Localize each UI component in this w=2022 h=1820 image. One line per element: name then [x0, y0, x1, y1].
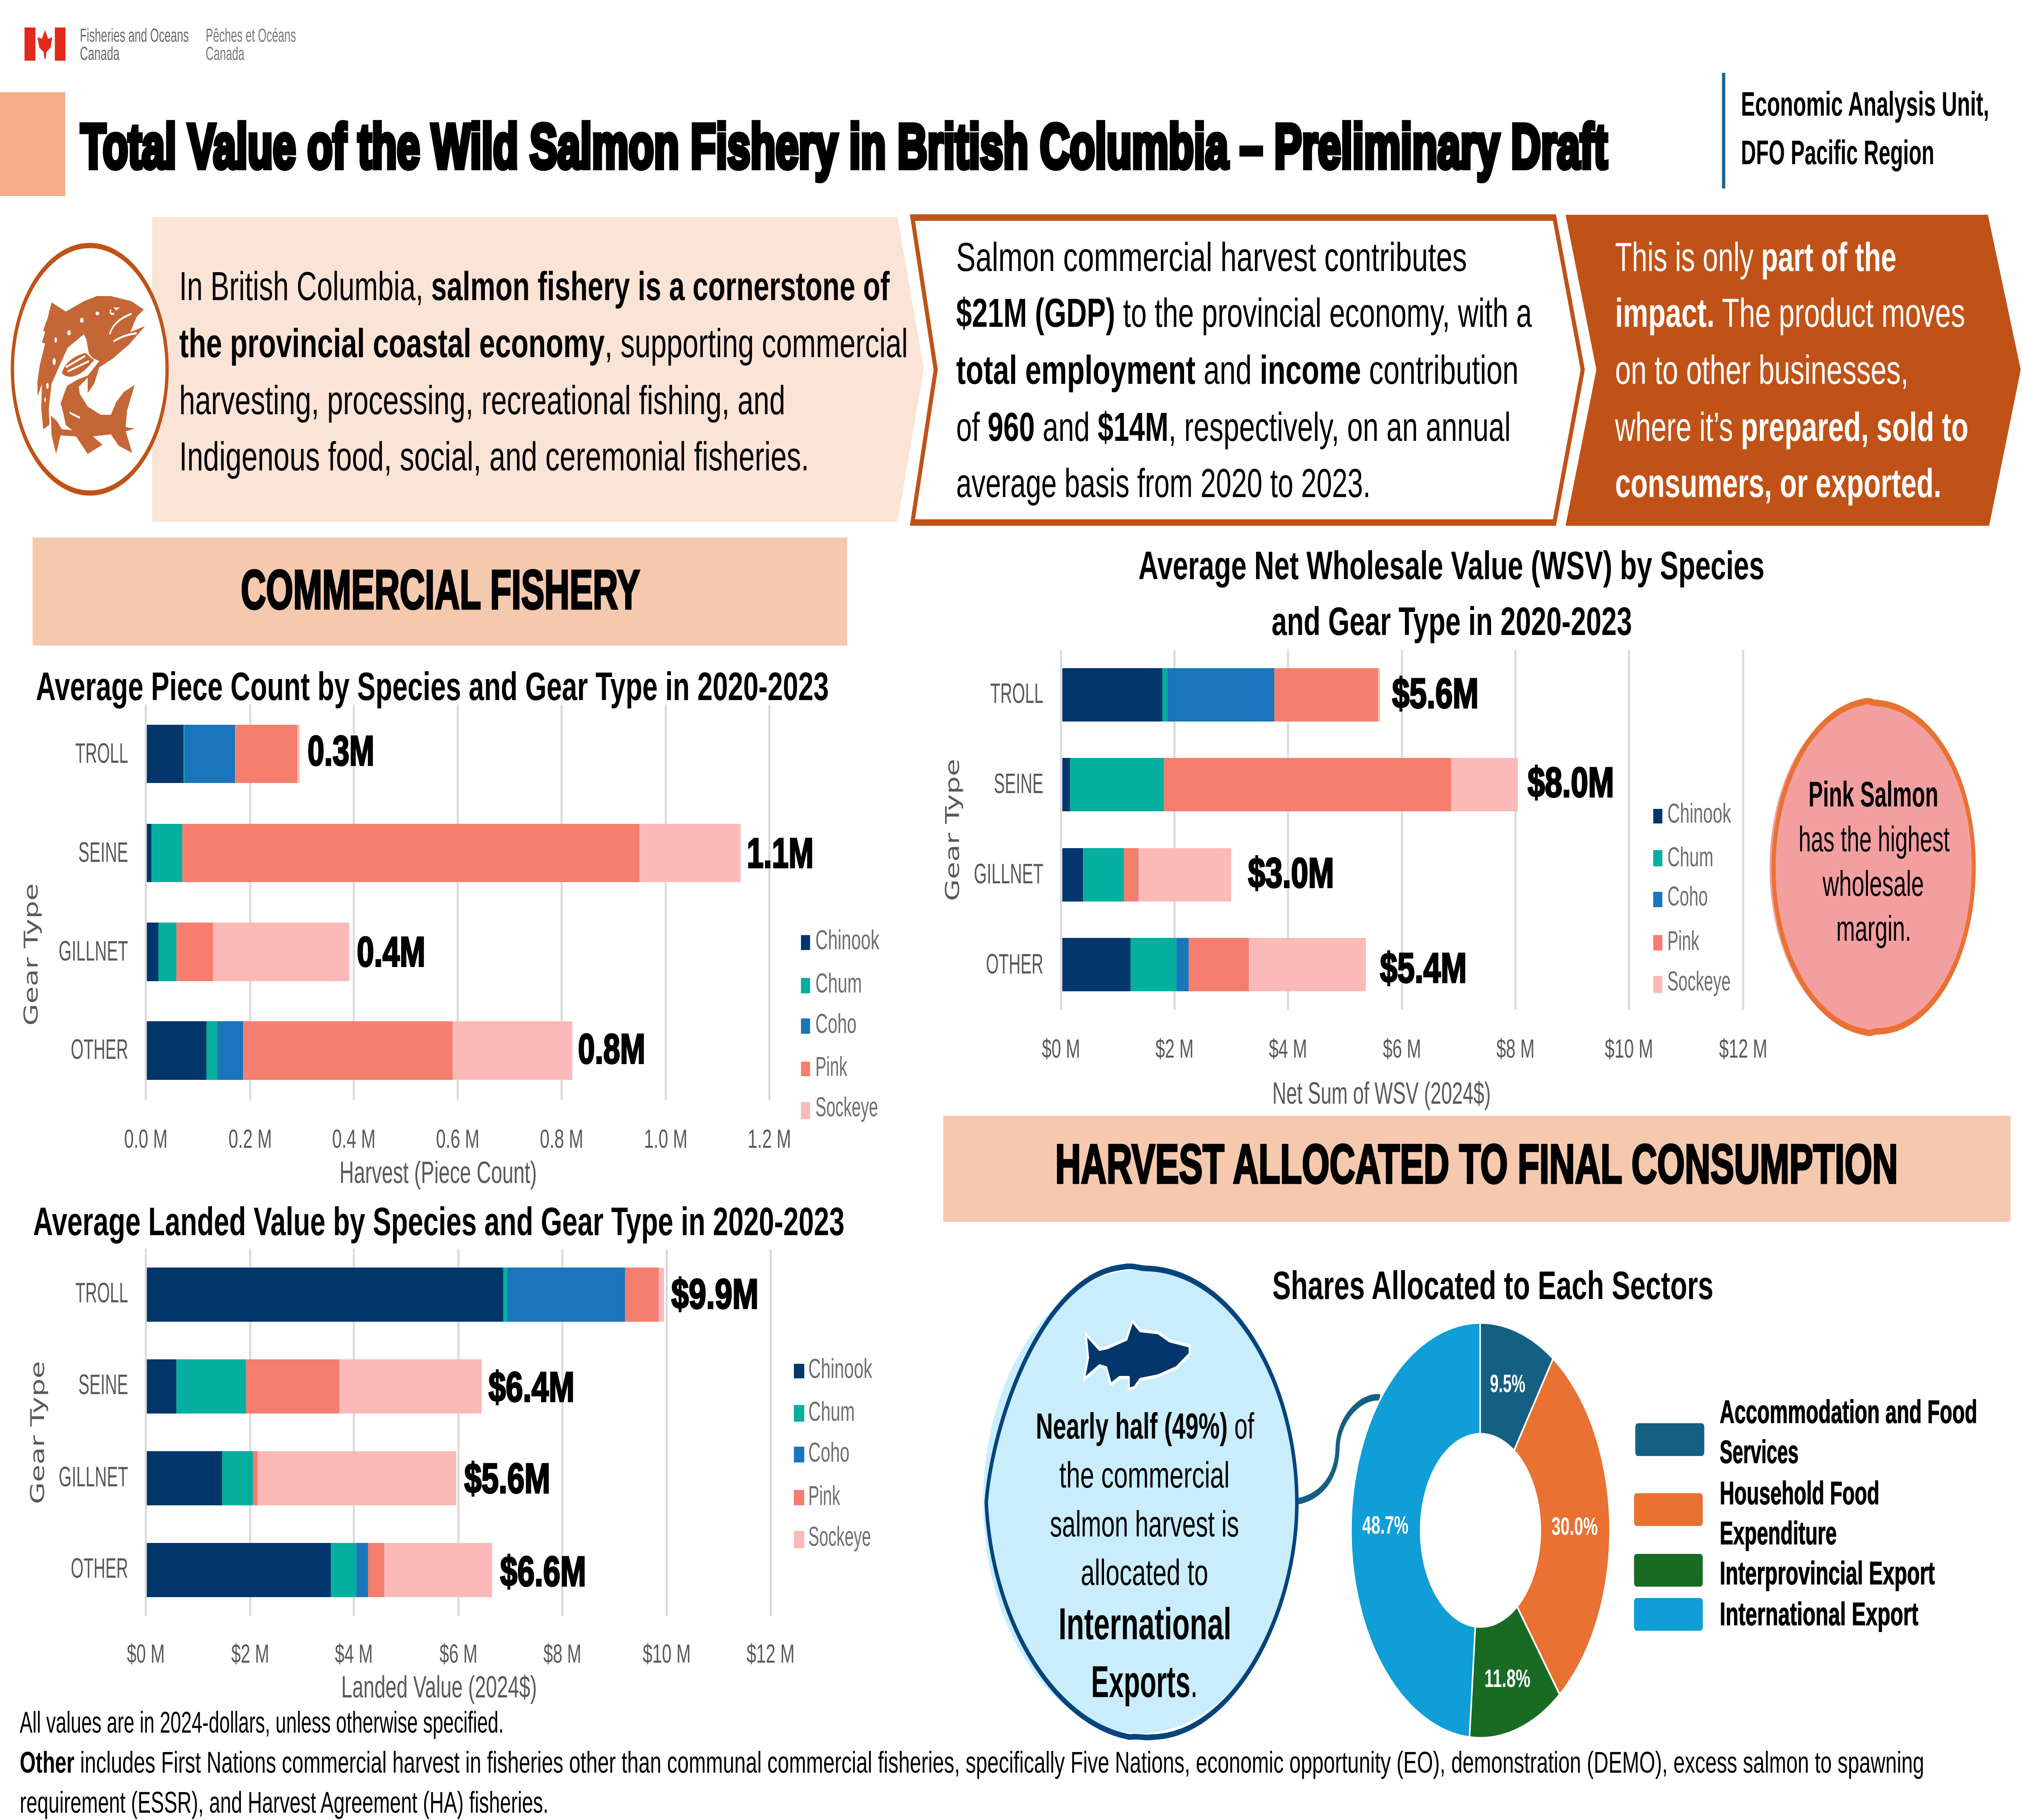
GDP text: $21M (GDP) to the provincial economy, with a	[956, 290, 1532, 336]
bar: troll	[1062, 668, 1380, 722]
chart title: wholesale value	[1138, 544, 1764, 644]
bar chart: landed value: $2 M	[231, 1639, 269, 1668]
bar chart: wholesale value: $6 M	[1383, 1034, 1421, 1063]
bar chart: piece count: TROLL	[75, 738, 128, 769]
unit attribution: DFO Pacific Region	[1741, 133, 1934, 171]
legend: species: Sockeye	[808, 1522, 871, 1552]
bar chart: piece count: 0.3M	[308, 727, 374, 775]
intro text: In British Columbia, salmon fishery is a cornerstone of	[179, 264, 890, 309]
bar chart: landed value: $10 M	[643, 1639, 691, 1668]
bar chart: piece count: 1.2 M	[748, 1124, 791, 1153]
legend: species: Coho	[1667, 881, 1708, 912]
unit attribution: Economic Analysis Unit,	[1741, 85, 1989, 123]
bar chart: piece count: 0.8M	[578, 1025, 645, 1073]
bar chart: wholesale value: $10 M	[1605, 1034, 1653, 1063]
legend: species: Sockeye	[815, 1092, 878, 1123]
impact text: impact. The product moves	[1615, 290, 1965, 336]
footnotes: All values are in 2024-dollars, unless otherwise specified.	[20, 1706, 504, 1740]
GDP text: average basis from 2020 to 2023.	[956, 461, 1371, 506]
callout: pink salmon: has the highest	[1799, 819, 1950, 859]
chart title: wholesale value: Average Net Wholesale Value (WSV) by Species	[1138, 544, 1764, 588]
donut chart: sector shares: 11.8%	[1485, 1664, 1530, 1692]
legend: species: Coho	[815, 1009, 857, 1039]
footnotes: requirement (ESSR), and Harvest Agreement (HA) fisheries.	[20, 1786, 548, 1820]
legend: species: Pink	[1667, 926, 1699, 957]
bar chart: landed value: SEINE	[78, 1369, 128, 1401]
impact text: This is only part of the	[1615, 235, 1896, 280]
donut chart: sector shares: 30.0%	[1552, 1512, 1598, 1540]
bar chart: landed value: OTHER	[71, 1553, 128, 1584]
callout: pink salmon: Pink Salmon	[1808, 775, 1938, 814]
panel: cornerstone intro	[152, 217, 924, 522]
callout: pink salmon	[1770, 701, 1974, 1033]
bar: other	[147, 1021, 572, 1080]
bar chart: landed value: Landed Value (2024$)	[341, 1670, 537, 1704]
GDP text	[956, 235, 1532, 506]
bar chart: piece count: Harvest (Piece Count)	[339, 1156, 537, 1190]
bar: gillnet	[1062, 848, 1231, 902]
footnotes	[20, 1706, 1924, 1820]
impact text: where it’s prepared, sold to	[1615, 404, 1969, 450]
bar chart: landed value: $9.9M	[671, 1270, 759, 1318]
impact text: consumers, or exported.	[1615, 461, 1942, 506]
bar chart: landed value: $0 M	[127, 1639, 165, 1668]
bar chart: piece count: 0.0 M	[124, 1124, 167, 1153]
logo: Fisheries and Oceans Canada: Canada	[206, 43, 245, 64]
bar chart: wholesale value: Gear Type	[941, 759, 963, 901]
bar chart: wholesale value: $5.4M	[1380, 944, 1467, 992]
heading: commercial fishery: COMMERCIAL FISHERY	[241, 559, 640, 621]
bar chart: piece count: SEINE	[78, 837, 128, 868]
donut chart: sector shares	[1351, 1323, 1610, 1738]
intro text: the provincial coastal economy , supporting commercial	[179, 321, 908, 366]
bar: seine	[1062, 758, 1518, 811]
bar: gillnet	[147, 1451, 456, 1505]
bar: troll	[147, 725, 300, 783]
bar chart: landed value: $8 M	[544, 1639, 582, 1668]
donut chart: sector shares: 9.5%	[1490, 1369, 1525, 1397]
bar chart: landed value: GILLNET	[59, 1461, 128, 1493]
GDP text: of 960 and $14M, respectively, on an annual	[956, 404, 1511, 450]
callout: pink salmon: wholesale	[1822, 864, 1924, 904]
bar chart: wholesale value: OTHER	[986, 948, 1043, 980]
callout: international exports: salmon harvest is	[1050, 1503, 1239, 1544]
legend: species: Chinook	[808, 1354, 872, 1384]
legend: species: Pink	[808, 1481, 840, 1511]
bar: troll	[147, 1268, 664, 1322]
legend: species: Chum	[815, 968, 862, 999]
bar chart: piece count: 0.2 M	[228, 1124, 272, 1153]
bar chart: landed value: TROLL	[75, 1277, 128, 1309]
legend: species	[794, 1354, 872, 1552]
intro text: Indigenous food, social, and ceremonial fisheries.	[179, 434, 809, 479]
impact text: on to other businesses,	[1615, 347, 1908, 393]
intro text	[179, 264, 908, 479]
icon: salmon silhouette	[1084, 1321, 1190, 1389]
panel: part of the impact	[1565, 215, 2021, 526]
legend: sectors: Household Food	[1720, 1475, 1880, 1511]
bar chart: piece count	[20, 705, 880, 1190]
bar: seine	[147, 1359, 482, 1414]
legend: species: Pink	[815, 1052, 847, 1082]
legend: species: Sockeye	[1667, 966, 1730, 997]
legend: species: Chinook	[815, 925, 880, 956]
bar chart: landed value: $12 M	[747, 1639, 795, 1668]
heading: commercial fishery	[33, 538, 847, 645]
legend: sectors: Interprovincial Export	[1720, 1555, 1935, 1591]
connector: callout to donut	[1298, 1397, 1380, 1501]
footnotes: Other includes First Nations commercial harvest in fisheries other than communal commercial fisheries, specifically Five Nations, economic opportunity (EO), demonstration (DEMO), excess salmon to spawning	[20, 1746, 1924, 1780]
GDP text: Salmon commercial harvest contributes	[956, 235, 1467, 280]
bar chart: wholesale value: $4 M	[1269, 1034, 1307, 1063]
legend: species: Chum	[1667, 842, 1713, 873]
panel: GDP contribution	[912, 218, 1583, 523]
bar chart: landed value: Gear Type	[26, 1361, 49, 1504]
chart title: shares: Shares Allocated to Each Sectors	[1272, 1263, 1713, 1308]
bar chart: landed value: $6.4M	[489, 1363, 575, 1411]
heading: harvest allocated	[943, 1116, 2011, 1222]
bar chart: wholesale value: $3.0M	[1248, 849, 1334, 897]
logo: Fisheries and Oceans Canada	[25, 25, 296, 64]
bar chart: piece count: GILLNET	[59, 935, 128, 967]
legend: species: Coho	[808, 1437, 850, 1468]
bar chart: wholesale value	[941, 650, 1767, 1111]
bar chart: landed value: $6.6M	[500, 1548, 586, 1595]
bar chart: piece count: 0.8 M	[540, 1124, 583, 1153]
legend: sectors: Accommodation and Food	[1720, 1394, 1977, 1430]
legend: species: Chinook	[1667, 798, 1731, 829]
logo: Fisheries and Oceans Canada: Fisheries and Oceans	[80, 25, 189, 46]
unit attribution	[1722, 73, 1989, 188]
title accent block	[0, 92, 65, 196]
callout: international exports	[983, 1266, 1297, 1737]
bar chart: piece count: OTHER	[71, 1034, 128, 1065]
logo: Fisheries and Oceans Canada: Pêches et Océans	[206, 25, 296, 46]
impact text	[1615, 235, 1969, 506]
bar chart: piece count: 0.4M	[357, 928, 425, 976]
chart title: piece count: Average Piece Count by Species and Gear Type in 2020-2023	[36, 665, 829, 709]
bar chart: wholesale value: $2 M	[1155, 1034, 1194, 1063]
bar chart: landed value: $4 M	[335, 1639, 373, 1668]
bar: other	[1062, 938, 1366, 991]
bar chart: wholesale value: SEINE	[994, 768, 1043, 800]
logo: Fisheries and Oceans Canada: Canada	[80, 43, 120, 64]
bar chart: wholesale value: Net Sum of WSV (2024$)	[1272, 1077, 1491, 1111]
bar chart: piece count: 1.0 M	[644, 1124, 687, 1153]
bar chart: piece count: Gear Type	[20, 883, 42, 1026]
chart title: landed value: Average Landed Value by Species and Gear Type in 2020-2023	[33, 1200, 844, 1244]
callout: international exports: Exports.	[1091, 1657, 1198, 1707]
bar: seine	[147, 824, 740, 882]
icon: leaping salmon in circle	[13, 245, 167, 493]
bar: other	[147, 1543, 492, 1597]
bar chart: landed value: $6 M	[440, 1639, 478, 1668]
bar chart: wholesale value: $8 M	[1496, 1034, 1535, 1063]
bar chart: wholesale value: GILLNET	[974, 858, 1043, 890]
title: Total Value of the Wild Salmon Fishery in British Columbia – Preliminary Draft	[80, 112, 1607, 182]
bar chart: piece count: 1.1M	[747, 830, 814, 877]
legend: sectors: Services	[1720, 1434, 1799, 1470]
GDP text: total employment and income contribution	[956, 347, 1519, 393]
legend: sectors: Expenditure	[1720, 1515, 1837, 1551]
bar chart: piece count: 0.4 M	[332, 1124, 376, 1153]
legend: species	[1653, 798, 1731, 997]
callout: international exports: Nearly half (49%) of	[1036, 1405, 1254, 1446]
heading: harvest allocated: HARVEST ALLOCATED TO FINAL CONSUMPTION	[1055, 1134, 1898, 1195]
callout: international exports: International	[1059, 1600, 1231, 1649]
bar chart: landed value: $5.6M	[464, 1455, 550, 1502]
bar chart: wholesale value: $5.6M	[1392, 670, 1478, 717]
bar chart: wholesale value: TROLL	[990, 678, 1043, 709]
callout: international exports: allocated to	[1081, 1552, 1208, 1593]
bar chart: piece count: 0.6 M	[436, 1124, 480, 1153]
legend: species	[801, 925, 880, 1123]
bar chart: wholesale value: $12 M	[1719, 1034, 1767, 1063]
bar chart: wholesale value: $0 M	[1042, 1034, 1080, 1063]
intro text: harvesting, processing, recreational fishing, and	[179, 378, 785, 423]
callout: international exports: the commercial	[1059, 1454, 1230, 1495]
chart title: wholesale value: and Gear Type in 2020-2023	[1271, 599, 1632, 644]
legend: sectors	[1634, 1394, 1977, 1632]
bar chart: landed value	[26, 1249, 872, 1704]
legend: sectors: International Export	[1720, 1596, 1918, 1632]
donut chart: sector shares: 48.7%	[1362, 1511, 1409, 1539]
legend: species: Chum	[808, 1397, 855, 1427]
bar chart: wholesale value: $8.0M	[1528, 759, 1614, 806]
callout: pink salmon: margin.	[1836, 909, 1911, 948]
bar: gillnet	[147, 923, 349, 981]
